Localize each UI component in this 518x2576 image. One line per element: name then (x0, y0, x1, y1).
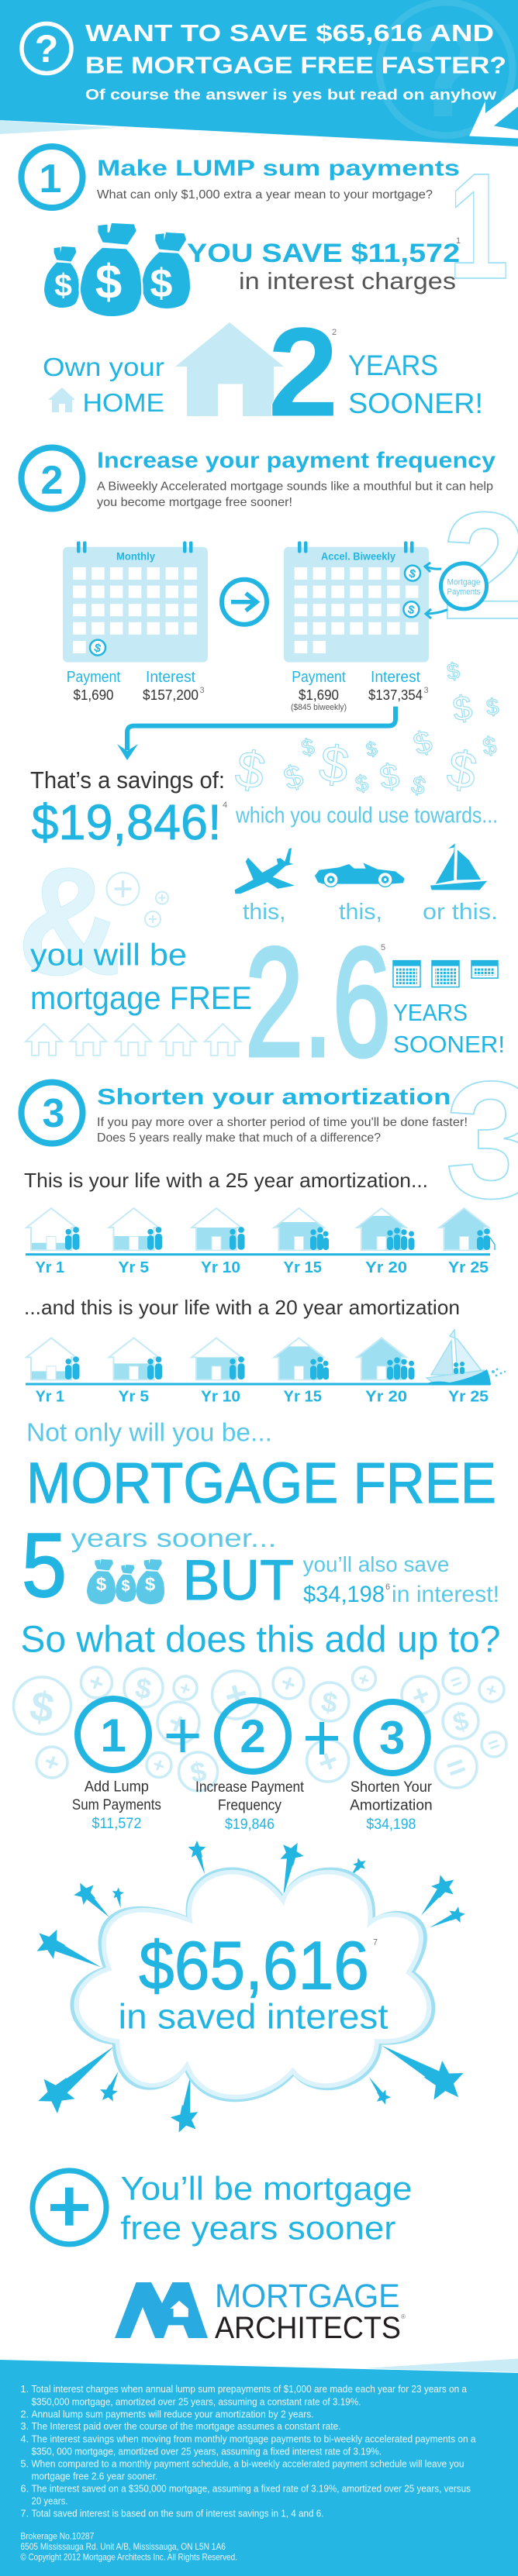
section 1 heading: Make LUMP sum payments (97, 157, 460, 181)
big number 2.6 (245, 916, 391, 1089)
footnotes: The Interest paid over the course of the mortgage assumes a constant rate. (31, 2420, 341, 2432)
falling dollar signs: $ (364, 738, 379, 761)
savings of 19,846 (30, 766, 498, 850)
mini calendars (393, 961, 498, 987)
this this or this labels: this, (339, 900, 382, 925)
footer panel (0, 2359, 518, 2576)
falling dollar signs: $ (299, 735, 316, 761)
but you'll also save: you’ll also save (303, 1552, 449, 1576)
house: year 20 (357, 1338, 406, 1379)
equation labels: Frequency (218, 1798, 281, 1814)
falling dollar signs: $ (377, 756, 402, 797)
equation labels: Add Lump (85, 1779, 149, 1795)
not only mortgage free (26, 1418, 496, 1515)
year labels: Yr 20 (365, 1259, 407, 1276)
but you'll also save (183, 1549, 499, 1612)
this this or this labels: or this. (423, 900, 498, 925)
footnotes: 20 years. (31, 2495, 68, 2507)
five years sooner (22, 1514, 277, 1616)
falling dollar signs (231, 659, 500, 801)
header banner: ? (406, 0, 486, 145)
logo: Mortgage Architects: MORTGAGE (215, 2278, 400, 2315)
section 1 heading (22, 146, 460, 208)
section 2 heading: Increase your payment frequency (97, 448, 496, 473)
house: year 5 (109, 1338, 158, 1379)
calendar: monthly: Monthly (116, 549, 155, 562)
but you'll also save: in interest! (392, 1582, 499, 1607)
monthly figures: $1,690 (73, 687, 113, 703)
section 2 heading: you become mortgage free sooner! (97, 496, 292, 509)
icon: first biweekly payment: $ (408, 567, 418, 581)
savings text (187, 236, 461, 294)
own your home 2 years sooner: Own your (43, 353, 164, 381)
mortgage payments circle with arrows: Mortgage (447, 578, 481, 587)
icon: three money bags: $ (54, 267, 72, 303)
year labels: Yr 25 (448, 1389, 489, 1406)
you will be mortgage free (30, 938, 252, 1016)
header banner (0, 0, 518, 146)
faint background coins: $ (26, 1682, 57, 1732)
falling dollar signs: $ (445, 659, 461, 685)
icon: small money bags: $ (145, 1574, 156, 1595)
equation: one plus two plus three: 1 (100, 1710, 126, 1762)
plus circle and closing message: free years sooner (121, 2210, 395, 2247)
footnotes: 6. (20, 2483, 29, 2494)
equation labels: $34,198 (366, 1817, 416, 1833)
section 3 heading: If you pay more over a shorter period of time you'll be done faster! (97, 1116, 468, 1129)
faint background coins: + (355, 1668, 372, 1691)
brokerage details: © Copyright 2012 Mortgage Architects Inc. All Rights Reserved. (20, 2551, 237, 2562)
monthly figures: Interest (146, 669, 195, 686)
icon: second biweekly payment (403, 601, 419, 618)
year labels (36, 1389, 489, 1406)
house: year 1 (26, 1208, 76, 1251)
you will be mortgage free: mortgage FREE (30, 980, 252, 1016)
faint background coins: + (407, 1678, 434, 1714)
faint background coins: + (150, 1752, 168, 1778)
own your home 2 years sooner: SOONER! (348, 387, 483, 419)
falling dollar signs: $ (481, 732, 498, 760)
faint background coins: $ (188, 1755, 209, 1789)
you will be mortgage free: you will be (30, 938, 187, 973)
falling dollar signs: $ (279, 757, 307, 797)
total savings text (118, 1927, 388, 2037)
faint background coins: + (277, 1668, 300, 1699)
icon: question mark circle (22, 23, 71, 73)
timeline: 25 year amortization (26, 1208, 495, 1276)
year labels: Yr 15 (284, 1259, 322, 1276)
equation labels: Increase Payment (195, 1779, 305, 1796)
own your home 2 years sooner (43, 301, 483, 443)
equation labels (72, 1779, 433, 1833)
faint background coins (14, 1667, 506, 1791)
year labels: Yr 20 (365, 1389, 407, 1406)
year labels: Yr 5 (118, 1259, 149, 1276)
footnotes: 5. (20, 2457, 29, 2469)
total savings text: $65,616 (139, 1927, 369, 2004)
monthly figures: Payment (67, 669, 121, 686)
icon: second biweekly payment: $ (406, 603, 416, 618)
big number 2: 2 (268, 301, 339, 443)
biweekly figures (291, 669, 429, 712)
icon: plane (235, 848, 295, 894)
icon: dollar payment day: $ (93, 641, 103, 656)
arrow: pointing down-left (469, 88, 518, 138)
falling dollar signs: $ (443, 739, 481, 801)
equation labels: $19,846 (225, 1817, 275, 1833)
title: BE MORTGAGE FREE FASTER? (85, 52, 506, 79)
house: year 1 (26, 1338, 76, 1379)
brokerage details: 6505 Mississauga Rd. Unit A/B, Mississauga, ON L5N 1A6 (20, 2541, 226, 2552)
icon: first biweekly payment (405, 566, 420, 581)
equation labels: Amortization (350, 1798, 433, 1814)
own your home 2 years sooner: HOME (82, 388, 164, 417)
falling dollar signs: $ (316, 734, 352, 794)
brokerage details: Brokerage No.10287 (20, 2531, 95, 2542)
cloud (72, 1869, 433, 2100)
total savings text: 7 (373, 1937, 378, 1947)
house: year 20 (357, 1208, 406, 1250)
monthly figures: 3 (200, 686, 205, 695)
year labels: Yr 10 (201, 1389, 240, 1406)
faint background coins: = (485, 1733, 502, 1757)
years sooner: SOONER! (393, 1031, 505, 1058)
large ampersand: & (17, 835, 122, 1007)
plus bubbles (107, 873, 168, 927)
faint background coins: + (482, 1679, 500, 1702)
equation labels: $11,572 (92, 1816, 141, 1832)
footnotes: Total saved interest is based on the sum of interest savings in 1, 4 and 6. (31, 2508, 324, 2519)
years sooner: YEARS (393, 999, 468, 1026)
timeline: 20 year amortization (26, 1330, 506, 1406)
footnotes: Total interest charges when annual lump sum prepayments of $1,000 are made each year for 23 years on a (31, 2383, 468, 2395)
icon: sailboat (430, 843, 487, 890)
year labels: Yr 1 (36, 1389, 64, 1406)
logo: Mortgage Architects: ARCHITECTS (215, 2311, 401, 2345)
faint background coins: + (85, 1667, 108, 1698)
faint background coins: + (313, 1741, 343, 1782)
house: year 5 (109, 1208, 158, 1250)
equation: one plus two plus three (78, 1699, 428, 1773)
faint background coins: + (219, 1671, 253, 1719)
icon: arrow circle (222, 580, 267, 625)
savings text: YOU SAVE $11,572 (187, 239, 460, 268)
monthly figures (67, 669, 205, 703)
savings of 19,846: 4 (223, 801, 227, 810)
falling dollar signs: $ (451, 689, 475, 728)
calendar: monthly (63, 541, 208, 662)
so what does this add up to: So what does this add up to? (20, 1620, 500, 1661)
title: Of course the answer is yes but read on anyhow (85, 87, 496, 104)
biweekly figures: Payment (292, 669, 346, 686)
falling dollar signs: $ (409, 771, 428, 800)
footnotes (20, 2383, 476, 2519)
equation: one plus two plus three: 2 (240, 1710, 266, 1762)
equation labels: Sum Payments (72, 1797, 161, 1813)
icon: three money bags (44, 222, 190, 317)
biweekly figures: $137,354 (368, 687, 423, 703)
this this or this labels (243, 900, 498, 925)
footnotes: $350, 000 mortgage, amortized over 25 years, assuming a fixed interest rate of 3.19%. (31, 2445, 382, 2457)
section 3 heading: Does 5 years really make that much of a difference? (97, 1131, 381, 1145)
footnotes: mortgage free 2.6 year sooner. (31, 2471, 157, 2481)
title (85, 19, 506, 104)
falling dollar signs: $ (409, 725, 437, 762)
section 3 heading: 3 (43, 1091, 64, 1136)
savings of 19,846: That’s a savings of: (30, 766, 225, 794)
biweekly figures: 3 (423, 686, 429, 695)
year labels: Yr 25 (448, 1259, 489, 1276)
footnotes: The interest saved on a $350,000 mortgage, assuming a fixed rate of 3.19%, amortized over 25 years, versus (31, 2483, 471, 2494)
footnotes: $350,000 mortgage, amortized over 25 years, assuming a constant rate of 3.19%. (31, 2395, 361, 2407)
section 3 heading (22, 1082, 468, 1145)
footnotes: When compared to a monthly payment schedule, a bi-weekly accelerated payment schedule will leave you (31, 2457, 464, 2469)
footnotes: Annual lump sum payments will reduce your amortization by 2 years. (31, 2408, 313, 2419)
but you'll also save: BUT (183, 1549, 294, 1612)
falling dollar signs: $ (231, 739, 269, 801)
footnotes: 3. (20, 2420, 29, 2432)
but you'll also save: 6 (385, 1582, 390, 1592)
icon: tiny house (48, 387, 75, 412)
icon: dollar payment day (90, 640, 105, 656)
biweekly figures: $1,690 (299, 687, 339, 703)
this this or this labels: this, (243, 900, 285, 925)
section 1 heading: What can only $1,000 extra a year mean to your mortgage? (97, 188, 433, 201)
25 year amortization heading: This is your life with a 25 year amortization... (24, 1169, 428, 1192)
falling dollar signs: $ (485, 694, 500, 721)
house: year 10 (192, 1338, 241, 1379)
family figures (65, 1227, 495, 1250)
savings text: in interest charges (239, 267, 456, 294)
savings of 19,846: $19,846! (31, 794, 222, 850)
20 year amortization heading: ...and this is your life with a 20 year amortization (24, 1296, 460, 1319)
monthly figures: $157,200 (143, 687, 199, 703)
faint background coins: + (162, 1705, 193, 1744)
icon: big house (175, 322, 284, 416)
falling dollar signs: $ (354, 771, 370, 797)
mortgage payments circle with arrows: Payments (447, 587, 481, 597)
total savings text: in saved interest (118, 1997, 388, 2037)
year labels: Yr 5 (118, 1389, 149, 1406)
calendar: accelerated biweekly: Accel. Biweekly (321, 549, 395, 562)
faint background coins: $ (319, 1686, 340, 1719)
plus circle and closing message (33, 2170, 413, 2247)
plus circle and closing message: You’ll be mortgage (121, 2170, 413, 2207)
savings text: 1 (456, 236, 461, 246)
big number 2.6: 5 (381, 943, 385, 952)
own your home 2 years sooner: YEARS (348, 350, 438, 381)
year labels (36, 1259, 489, 1276)
title: WANT TO SAVE $65,616 AND (85, 19, 494, 46)
footnotes: 1. (20, 2383, 29, 2395)
icon: car (315, 863, 405, 887)
faint background coins: $ (450, 1706, 471, 1738)
faint background coins: = (447, 1670, 465, 1693)
not only mortgage free: Not only will you be... (26, 1418, 272, 1447)
years sooner (393, 999, 505, 1058)
house: year 15 (275, 1208, 324, 1250)
year labels: Yr 10 (201, 1259, 240, 1276)
logo: Mortgage Architects (115, 2278, 406, 2345)
icon: small money bags: $ (96, 1574, 107, 1595)
section 3 heading: Shorten your amortization (97, 1085, 451, 1110)
equation labels: Shorten Your (351, 1779, 433, 1796)
section 2 heading (22, 448, 496, 509)
family figures (65, 1356, 414, 1379)
faint background coins: + (176, 1677, 194, 1700)
footnotes: 2. (20, 2408, 29, 2419)
faint background coins: = (442, 1748, 471, 1787)
logo: Mortgage Architects: ® (401, 2313, 406, 2320)
biweekly figures: ($845 biweekly) (291, 703, 347, 712)
calendar: accelerated biweekly (284, 541, 429, 662)
mortgage payments circle with arrows (425, 563, 487, 618)
stars bursting from cloud (29, 1838, 470, 2134)
icon: three money bags: $ (150, 261, 173, 306)
section 1 heading: 1 (40, 157, 61, 201)
equation: one plus two plus three: 3 (379, 1712, 405, 1764)
icon: small money bags: $ (121, 1578, 130, 1595)
but you'll also save: $34,198 (303, 1582, 385, 1607)
five years sooner: years sooner... (71, 1524, 277, 1552)
icon: question mark circle: ? (35, 27, 58, 71)
footnotes: 7. (20, 2508, 29, 2519)
row of outline houses (26, 1024, 241, 1056)
footnotes: The interest savings when moving from monthly mortgage payments to bi-weekly accelerated payments on a (31, 2433, 476, 2444)
year labels: Yr 1 (36, 1259, 64, 1276)
house: year 10 (192, 1208, 241, 1250)
section 2 heading: 2 (41, 458, 63, 503)
icon: sailboat on waves (423, 1330, 506, 1385)
icon: small money bags (87, 1559, 164, 1604)
faint background coins: $ (133, 1672, 154, 1705)
year labels: Yr 15 (284, 1389, 322, 1406)
five years sooner: 5 (22, 1514, 67, 1616)
arrow: savings connector (117, 707, 395, 760)
big number 2.6: 2.6 (245, 916, 391, 1089)
faint background coins: + (40, 1747, 64, 1778)
footnotes: 4. (20, 2433, 29, 2444)
icon: three money bags: $ (95, 256, 122, 309)
brokerage details (20, 2531, 237, 2562)
house: year 25 (439, 1208, 489, 1250)
biweekly figures: Interest (371, 669, 420, 686)
own your home 2 years sooner: 2 (332, 328, 337, 337)
not only mortgage free: MORTGAGE FREE (26, 1451, 496, 1515)
house: year 15 (275, 1338, 324, 1379)
section 2 heading: A Biweekly Accelerated mortgage sounds like a mouthful but it can help (97, 480, 493, 493)
